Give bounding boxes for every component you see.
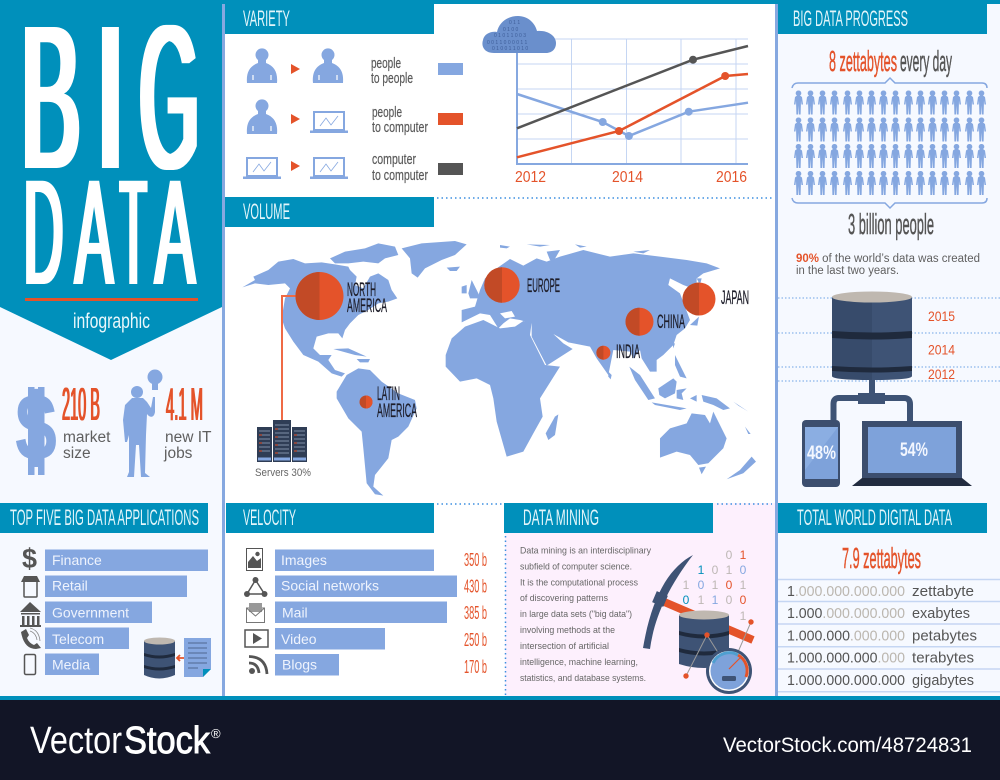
year labels: 2016 [716, 169, 747, 186]
body text: involving methods at the [520, 625, 615, 636]
panel: velocity: VELOCITY [243, 505, 296, 530]
panel: market stats: 210 B [62, 378, 100, 430]
table units [912, 583, 977, 689]
binary digits: 1 [740, 548, 747, 562]
region labels [347, 276, 749, 422]
binary digits: 1 [712, 593, 719, 607]
year labels: 2012 [928, 367, 955, 382]
icon: finance: $ [22, 543, 37, 574]
logo text: Stock: Stock [124, 720, 211, 762]
values: 250 b [464, 630, 487, 650]
region labels: AMERICA [347, 296, 387, 317]
world map: Americas [242, 241, 467, 496]
icon: mail [246, 603, 264, 622]
icon: images [246, 548, 262, 570]
top brace [792, 78, 987, 88]
column divider left [222, 4, 225, 697]
label: new IT jobs: new IT [165, 429, 212, 446]
binary digits: 0 [726, 578, 733, 592]
icon: retail [21, 576, 40, 597]
icon: person with lightbulb [123, 370, 162, 477]
bottom brace [792, 198, 987, 208]
footer background [0, 700, 1000, 780]
values: 430 b [464, 576, 487, 596]
body text: in large data sets ("big data") [520, 609, 632, 620]
table units: petabytes [912, 628, 977, 644]
series: computer to computer [517, 46, 748, 128]
dotted year rules [778, 298, 1000, 381]
text: 90 percent: in the last two years. [796, 265, 899, 277]
bar labels: Blogs [282, 656, 317, 672]
body text: subfield of computer science. [520, 562, 632, 572]
binary digits: 1 [740, 609, 747, 623]
heading bar [504, 503, 713, 533]
top band [0, 0, 1000, 4]
legend swatches [438, 63, 463, 175]
heading bar [226, 503, 434, 533]
year labels: 2015 [928, 309, 955, 324]
legend labels: to computer [372, 119, 428, 136]
data circle: China [626, 308, 654, 336]
text: 90 percent: 90% of the world’s data was created [796, 253, 980, 265]
legend labels: to people [371, 70, 413, 87]
values: 170 b [464, 657, 487, 677]
icon: data cloud: 0 1 0 0 1 1 0 1 0 [492, 46, 528, 52]
bar labels: Retail [52, 578, 88, 594]
title: DATA: T [120, 150, 147, 317]
bar labels: Media [52, 656, 90, 672]
panel: title banner [0, 0, 222, 360]
year labels: 2014 [612, 169, 643, 186]
panel: top five applications [0, 503, 211, 678]
region labels: CHINA [657, 312, 685, 333]
label: new IT jobs: jobs [163, 445, 193, 462]
connector line [282, 296, 297, 421]
table numbers: 1.000.000.000.000 [787, 672, 905, 689]
title: BIG [21, 0, 199, 212]
icon: laptop [852, 421, 972, 486]
table numbers [787, 583, 905, 689]
value: 54%: 54% [900, 440, 928, 461]
data circle: Europe [484, 267, 520, 303]
value: 48%: 48% [807, 443, 836, 464]
binary digits: 0 [712, 563, 719, 577]
panel: big data progress [778, 4, 1000, 487]
icon: servers [257, 420, 307, 462]
body text: of discovering patterns [520, 593, 608, 604]
icon: data cloud: 0 1 1 [509, 20, 520, 26]
binary digits: 1 [698, 593, 705, 607]
legend labels: to computer [372, 167, 428, 184]
arrow [177, 655, 184, 661]
icon: social networks [244, 577, 268, 597]
values: 350 b [464, 550, 487, 570]
bar labels [52, 552, 129, 672]
binary digits: 0 [726, 593, 733, 607]
heading bar [778, 4, 987, 34]
binary digits: 1 [740, 578, 747, 592]
icon: database with years [832, 292, 912, 380]
text: 90 percent [796, 253, 980, 277]
binary digits: 1 [712, 578, 719, 592]
axes [517, 39, 748, 164]
series: people to people [517, 94, 748, 140]
bottom teal band [0, 696, 1000, 700]
binary digits: 0 [683, 593, 690, 607]
data circle: India [596, 346, 610, 360]
people pictogram grid [794, 90, 986, 195]
legend labels: computer [372, 151, 416, 168]
icon: data cloud [482, 16, 556, 53]
legend labels: people [371, 55, 401, 72]
data circle: North America [296, 272, 344, 320]
region labels: LATIN [377, 384, 400, 405]
watermark footer [0, 700, 1000, 780]
label: market size: market [63, 429, 111, 446]
data circle: Latin America [360, 396, 372, 408]
binary digits [683, 548, 747, 623]
panel: velocity [226, 503, 487, 677]
heading: VARIETY [243, 6, 290, 31]
title: DATA: A [75, 149, 113, 317]
region labels: INDIA [616, 342, 640, 363]
url text: VectorStock.com/48724831 [723, 734, 972, 757]
year labels: 2014 [928, 342, 955, 358]
heading: DATA MINING [523, 505, 599, 530]
logo text: Vector: Vector [30, 720, 122, 762]
stat: 8 zettabytes every day: 8 zettabytes [829, 46, 897, 78]
red rule [25, 298, 198, 301]
body text [520, 546, 651, 684]
bar labels: Video [281, 631, 317, 647]
year labels [928, 309, 955, 382]
title: DATA [24, 149, 195, 317]
banner shape [0, 0, 222, 360]
heading bar [0, 503, 208, 533]
line chart [482, 16, 748, 186]
connector nodes [683, 619, 754, 679]
icon: database [144, 638, 175, 678]
heading bar [225, 4, 434, 34]
heading: VOLUME [243, 199, 290, 224]
bar labels: Government [52, 604, 129, 620]
binary digits: 1 [683, 578, 690, 592]
legend labels: people [372, 104, 402, 121]
dotted rules [437, 198, 773, 695]
bar labels: Telecom [52, 631, 104, 647]
icon: video [245, 630, 268, 647]
icon: data cloud: 0 1 0 0 [503, 27, 519, 33]
icon: database [679, 610, 729, 668]
table numbers: 1.000.000.000.000 [787, 605, 905, 622]
table units: zettabyte [912, 583, 974, 600]
values [464, 550, 487, 677]
body text: intelligence, machine learning, [520, 657, 638, 668]
table numbers: 1.000.000.000.000 [787, 650, 905, 666]
binary digits: 0 [740, 563, 747, 577]
body text: statistics, and database systems. [520, 673, 646, 684]
column divider right [775, 4, 778, 697]
icon: government [20, 602, 41, 627]
icon row: computer to computer [243, 158, 348, 179]
table numbers: 1.000.000.000.000 [787, 583, 905, 600]
icon: document [184, 638, 211, 677]
panel: data mining [504, 503, 754, 694]
icon row: people to people [247, 48, 343, 83]
heading: TOP FIVE BIG DATA APPLICATIONS [10, 505, 199, 530]
bars [45, 550, 208, 675]
binary digits: 0 [698, 578, 705, 592]
world map: Europe, Africa, Asia, Oceania [446, 244, 756, 479]
table rules [778, 580, 1000, 692]
region labels: AMERICA [377, 401, 417, 422]
body text: Data mining is an interdisciplinary [520, 546, 651, 556]
icon: telecom [21, 628, 41, 649]
binary digits: 0 [740, 593, 747, 607]
values: 385 b [464, 603, 487, 623]
table numbers: 1.000.000.000.000 [787, 628, 905, 644]
bar labels: Social networks [281, 578, 379, 594]
label: servers: Servers 30% [255, 467, 311, 479]
table units: gigabytes [912, 672, 974, 689]
binary digits: 0 [726, 548, 733, 562]
label: market size: size [63, 445, 91, 462]
subtitle: infographic [73, 310, 150, 333]
bar labels: Mail [282, 604, 308, 620]
year labels: 2012 [515, 169, 546, 186]
icon: blogs [249, 656, 267, 674]
icon: data cloud: 0 0 1 1 0 0 0 0 1 1 [487, 40, 528, 46]
heading bar [778, 503, 987, 533]
icon row: people to computer [247, 99, 348, 134]
icon: phone [802, 420, 840, 487]
binary digits: 1 [698, 563, 705, 577]
table units: exabytes [912, 605, 970, 622]
icon: media [24, 654, 36, 674]
panel: data mining background [505, 503, 775, 697]
body text: It is the computational process [520, 578, 638, 588]
grid [517, 39, 748, 163]
pipes [834, 380, 910, 421]
region labels: EUROPE [527, 276, 560, 297]
icon: dollar: $ [15, 374, 57, 481]
panel: total world digital data [778, 503, 1000, 692]
body text: intersection of artificial [520, 641, 609, 652]
panel: market stats [15, 370, 212, 481]
binary digits: 1 [726, 563, 733, 577]
bar labels: Finance [52, 552, 102, 568]
panel: volume: JAPAN [721, 288, 749, 309]
icon: pickaxe [643, 555, 753, 649]
title: DATA: D [24, 149, 63, 316]
table units: terabytes [912, 650, 974, 666]
year labels [515, 169, 747, 186]
panel: volume [225, 197, 756, 496]
registered mark: ® [211, 726, 221, 741]
series: people to computer [517, 72, 748, 157]
bar labels: Images [281, 552, 327, 568]
legend labels [371, 55, 428, 184]
title: DATA: A [155, 150, 195, 317]
panel: central white area [225, 0, 775, 697]
data circle: Japan [682, 282, 716, 316]
text: 4.1 M [166, 378, 203, 430]
bars [275, 550, 457, 676]
heading bar [225, 197, 434, 227]
region labels: NORTH [347, 280, 376, 301]
bar labels [281, 552, 379, 672]
panel: variety [225, 4, 463, 184]
icon: gauge [706, 648, 752, 694]
icon: data cloud: 0 1 0 1 1 0 0 3 [494, 33, 526, 39]
